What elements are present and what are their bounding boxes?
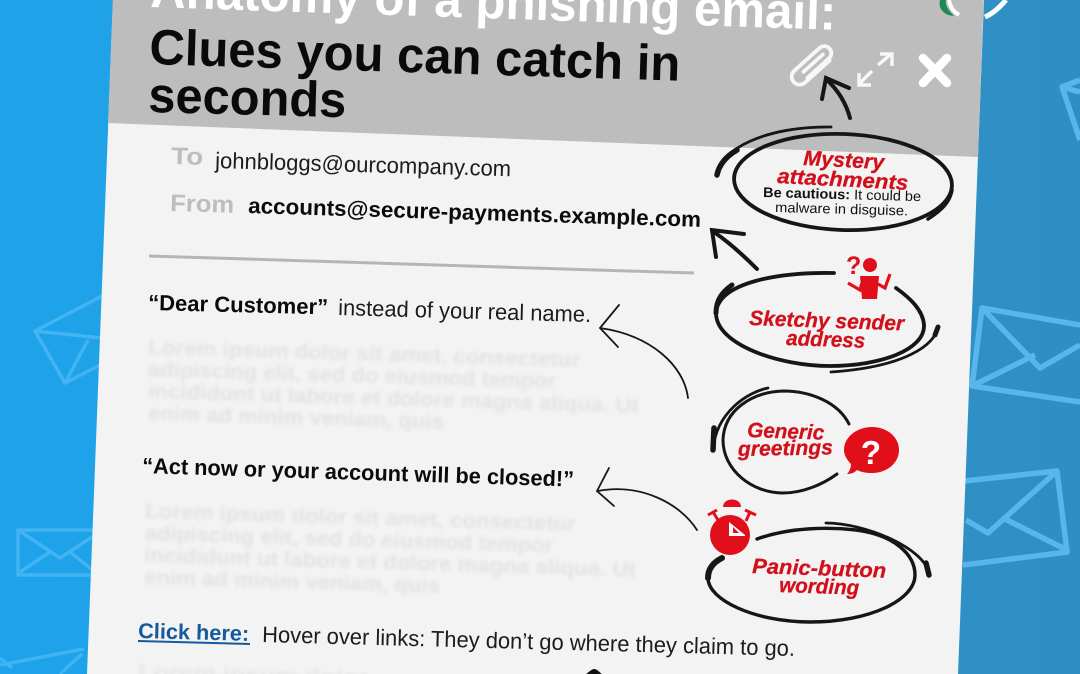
title: Clues you can catch in xyxy=(149,19,681,92)
icon: close X xyxy=(923,58,947,83)
callout: generic greetings: Generic xyxy=(747,419,825,445)
recipient row: To xyxy=(171,143,204,171)
callout: generic greetings: greetings xyxy=(737,436,833,461)
arrow to greeting line xyxy=(600,305,688,398)
blurred body text 2 xyxy=(144,500,636,598)
arrow tip at bottom xyxy=(586,669,602,674)
callout: mystery attachments: Mystery xyxy=(803,147,886,174)
callout: panic-button wording: Panic-button xyxy=(752,555,887,583)
clue: urgency line: “Act now or your account will be closed!” xyxy=(142,453,574,492)
arrow to attachment icon xyxy=(822,78,850,118)
blurred body text 1: incididunt ut labore et dolore magna aliqua. Ut xyxy=(148,380,639,418)
blurred body text 1: Lorem ipsum dolor sit amet, consectetur xyxy=(148,336,580,372)
blurred body text 2: adipiscing elit, sed do eiusmod tempor xyxy=(145,522,553,557)
callout: panic-button wording xyxy=(708,500,929,622)
title xyxy=(148,0,837,128)
icon: question bubble xyxy=(844,427,899,474)
blurred body text 1: enim ad minim veniam, quis xyxy=(148,402,444,434)
icon: expand arrows xyxy=(859,54,892,85)
icon: alarm clock xyxy=(708,500,756,555)
clue: greeting line xyxy=(148,290,591,327)
callout: mystery attachments: malware in disguise. xyxy=(775,199,908,218)
sender row: accounts@secure-payments.example.com xyxy=(248,193,701,232)
panel header band xyxy=(108,0,984,157)
icon: confused person: ? xyxy=(846,252,861,280)
recipient row: johnbloggs@ourcompany.com xyxy=(214,148,511,181)
clue: greeting line: instead of your real name. xyxy=(338,295,591,327)
callout: mystery attachments xyxy=(717,127,954,234)
blurred body text 2: enim ad minim veniam, quis xyxy=(144,566,440,598)
callout: generic greetings xyxy=(713,388,899,493)
callout: mystery attachments: Be cautious: It could be xyxy=(763,184,921,204)
callout: sketchy sender address xyxy=(716,252,938,372)
sender row: From xyxy=(170,190,235,219)
callout: sketchy sender address: address xyxy=(786,327,866,353)
blurred body text 2: Lorem ipsum dolor sit amet, consectetur xyxy=(145,500,576,536)
blurred body text 2: incididunt ut labore et dolore magna aliqua. Ut xyxy=(144,544,636,582)
logo fragments at top right xyxy=(940,0,1006,17)
blurred body text 1: adipiscing elit, sed do eiusmod tempor xyxy=(148,358,556,393)
callout: sketchy sender address: Sketchy sender xyxy=(749,307,906,335)
title: seconds xyxy=(148,67,347,128)
blurred body text 1 xyxy=(148,336,639,434)
icon: confused person xyxy=(846,252,890,299)
clue: link line: Hover over links: They don’t go where they claim to go. xyxy=(262,622,795,661)
clue: link line: Click here: xyxy=(138,619,249,646)
clue: greeting line: “Dear Customer” xyxy=(148,290,328,319)
header icons xyxy=(788,43,947,88)
icon: paperclip xyxy=(788,43,836,88)
icon: question bubble: ? xyxy=(861,434,881,471)
callout: panic-button wording: wording xyxy=(779,574,860,600)
callout: mystery attachments: attachments xyxy=(777,165,909,195)
arrow to sender address xyxy=(712,230,757,269)
arrow to urgency line xyxy=(597,468,697,530)
